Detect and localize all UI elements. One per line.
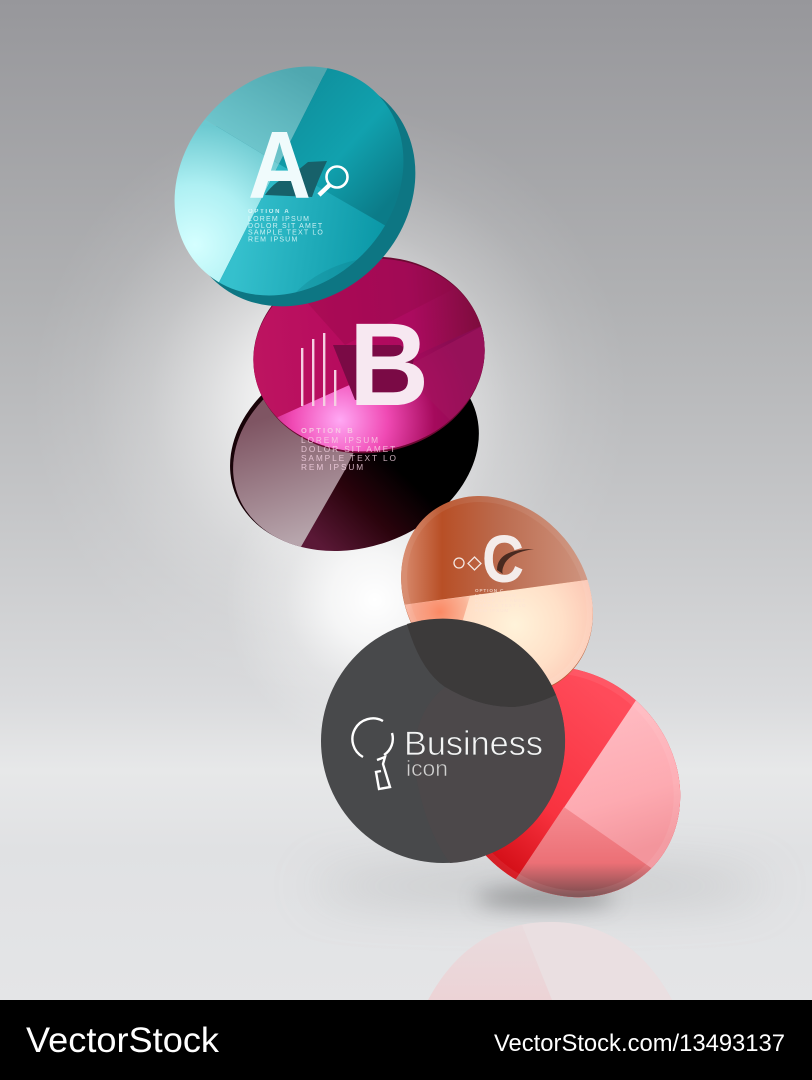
VectorStock logo text: VectorStock [26,1021,220,1060]
option C text [475,588,526,613]
option B text: SAMPLE TEXT LO [301,453,398,463]
option A text: DOLOR SIT AMET [248,223,323,230]
panel: red disc [486,669,680,898]
Business label: Business [404,725,543,763]
letter C: C [482,522,524,597]
reflection of red disc [428,922,632,1000]
option A text: LOREM IPSUM [248,216,310,223]
overlap with orange disc [407,619,556,707]
option C text: OPTION C [475,588,504,593]
dark arrow in letter C [497,549,534,574]
floor shadow [310,873,770,906]
icon: circle and diamond [454,557,481,570]
option A text: REM IPSUM [248,236,298,244]
option A text [248,209,324,244]
footer bar [0,1000,812,1080]
icon: bar chart lines [301,333,336,406]
option C text: SAMPLE TEXT LO [475,603,526,608]
option C text: LOREM IPSUM [475,593,517,598]
dark arrow behind letter B [333,345,415,400]
panel: dark circle Business icon [321,619,565,863]
panel: magenta disc B [253,257,485,470]
panel: dark disc [230,395,479,551]
overlap with red disc [414,687,565,863]
panel: orange disc C [401,496,593,686]
icon label: icon [406,756,448,781]
option B text: DOLOR SIT AMET [301,444,397,454]
icon: magnifier outline [352,718,393,789]
icon: magnifier [319,166,348,195]
option C text: DOLOR SIT AMET [475,598,526,603]
option B text: REM IPSUM [301,462,365,472]
option A text: OPTION A [248,209,290,215]
option A text: SAMPLE TEXT LO [248,230,324,236]
letter B: B [349,299,429,431]
option B text [301,426,398,472]
panel: teal disc A [174,66,416,306]
image id text: VectorStock.com/13493137 [494,1030,785,1057]
option B text: OPTION B [301,426,355,435]
letter A: A [248,112,311,219]
option C text: REM IPSUM [475,608,509,613]
option B text: LOREM IPSUM [301,435,380,445]
dark arrow behind letter A [265,161,327,197]
